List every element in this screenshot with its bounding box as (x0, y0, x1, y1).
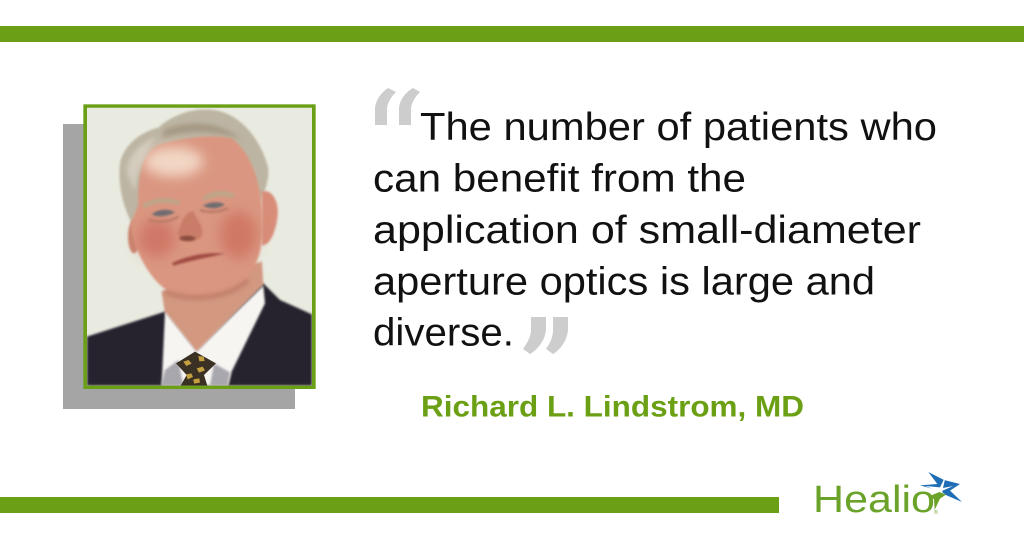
bottom green bar (0, 497, 779, 513)
icon: Healio star (920, 472, 962, 510)
mouth (172, 253, 225, 266)
neck (162, 262, 263, 353)
Healio logo: ® (934, 509, 938, 516)
tie (176, 352, 216, 386)
quote text (373, 106, 937, 354)
quote text: The number of patients who (420, 106, 937, 149)
photo shadow panel (63, 124, 295, 409)
quote text: aperture optics is large and (373, 260, 875, 304)
shirt stripes (161, 360, 230, 386)
portrait photo of Richard L. Lindstrom (83, 104, 316, 389)
ears (262, 191, 278, 245)
shirt (162, 286, 265, 386)
eyebrows (143, 191, 235, 209)
jaw shadow (165, 280, 248, 298)
cheek flush (138, 220, 175, 257)
Healio logo (813, 472, 962, 521)
suit (87, 283, 312, 386)
face (131, 136, 263, 296)
hair highlight (126, 138, 154, 188)
quote text: application of small-diameter (373, 209, 921, 252)
quote text: diverse. (373, 312, 514, 354)
attribution name: Richard L. Lindstrom, MD (421, 390, 804, 424)
eyes (152, 202, 225, 216)
opening quotation mark (375, 88, 420, 125)
closing quotation mark (523, 317, 568, 354)
forehead highlight (143, 147, 203, 177)
hair mass (119, 110, 268, 228)
darker hair sweep (163, 123, 242, 140)
Healio logo: Healio (813, 479, 935, 521)
nose (177, 212, 202, 241)
eye sockets shadow (148, 208, 228, 222)
top green bar (0, 26, 1024, 42)
quote text: can benefit from the (373, 158, 746, 200)
